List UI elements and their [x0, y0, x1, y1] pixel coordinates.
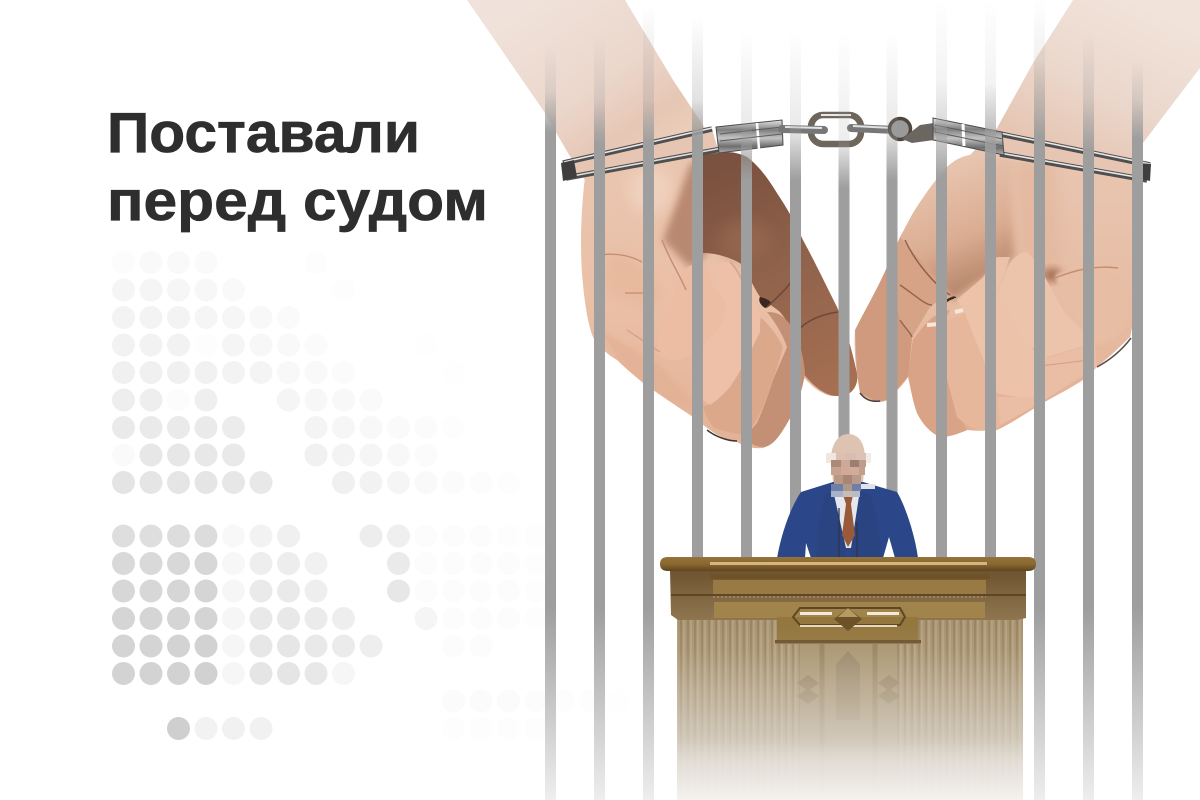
- right arm and hand: [855, 0, 1200, 437]
- lectern fade to white: [670, 620, 1030, 800]
- lectern top cap: [660, 557, 1036, 571]
- title: перед судом: [107, 169, 488, 233]
- lectern lower fluted body: [677, 618, 1023, 800]
- chain link: [782, 115, 934, 144]
- left arm and hand: [467, 0, 857, 448]
- shirt: [833, 490, 860, 548]
- pixelated face: [826, 453, 875, 497]
- suit jacket: [777, 482, 918, 558]
- head: [831, 434, 865, 482]
- title: Поставали: [107, 101, 420, 165]
- lectern centre plaque: [775, 608, 921, 644]
- lectern stripe wash: [677, 650, 1023, 800]
- microphones: [839, 508, 857, 558]
- dotted world map background: [112, 251, 630, 740]
- lectern ornaments: [836, 651, 860, 720]
- lectern upper band: [670, 570, 1026, 620]
- right hand fingers: [860, 240, 1131, 437]
- title: [107, 101, 488, 233]
- lectern: [660, 557, 1036, 800]
- right cuff: [933, 118, 1151, 181]
- person behind lectern: [777, 434, 918, 558]
- tie: [842, 495, 855, 547]
- prison bars: [545, 0, 1143, 800]
- left hand fingers: [600, 240, 838, 447]
- left cuff: [561, 120, 783, 181]
- handcuffs: [561, 115, 1151, 181]
